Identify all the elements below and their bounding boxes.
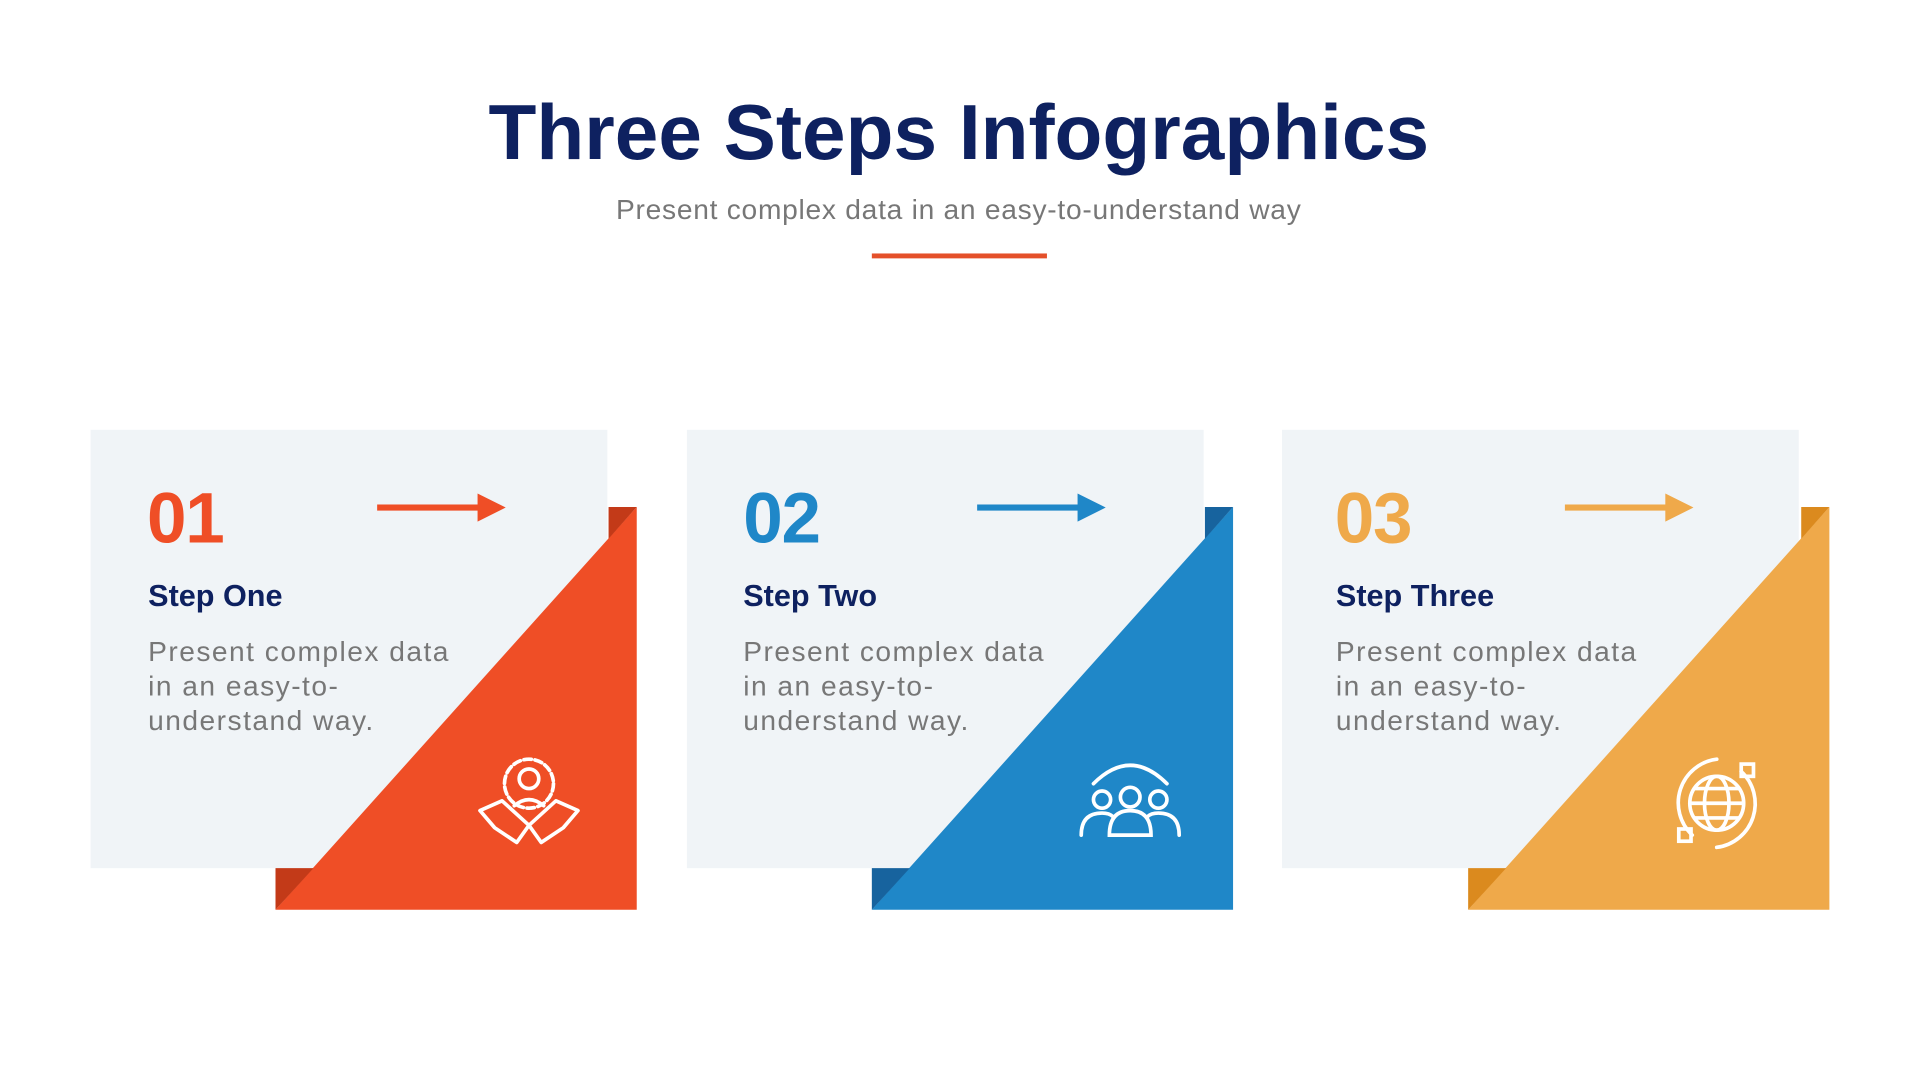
subtitle: Present complex data in an easy-to-understand way (616, 194, 1302, 225)
panel: step two (687, 430, 1233, 910)
arrow (377, 493, 506, 522)
heading: Step Two (743, 579, 877, 613)
arrow (1565, 493, 1693, 522)
title: Three Steps Infographics (489, 88, 1429, 176)
body text: Present complex data (1336, 636, 1638, 667)
body text: understand way. (743, 705, 970, 736)
panel: step three (1282, 430, 1829, 910)
body text: Present complex data (743, 636, 1045, 667)
body text: understand way. (1336, 705, 1562, 736)
number 02: 02 (743, 479, 820, 558)
panel: step one (91, 430, 637, 910)
number 03: 03 (1335, 479, 1411, 558)
number 01: 01 (147, 479, 223, 558)
icon: globe (1678, 759, 1755, 847)
body text: in an easy-to- (743, 671, 934, 702)
icon: handshake gear (480, 759, 578, 842)
body text: Present complex data (148, 636, 450, 667)
body text: in an easy-to- (1336, 671, 1527, 702)
body text: in an easy-to- (148, 671, 339, 702)
arrow (977, 493, 1106, 522)
icon: group of people (1081, 765, 1179, 835)
title underline (872, 253, 1047, 258)
heading: Step One (148, 579, 283, 613)
body text: understand way. (148, 705, 375, 736)
heading: Step Three (1336, 579, 1494, 613)
